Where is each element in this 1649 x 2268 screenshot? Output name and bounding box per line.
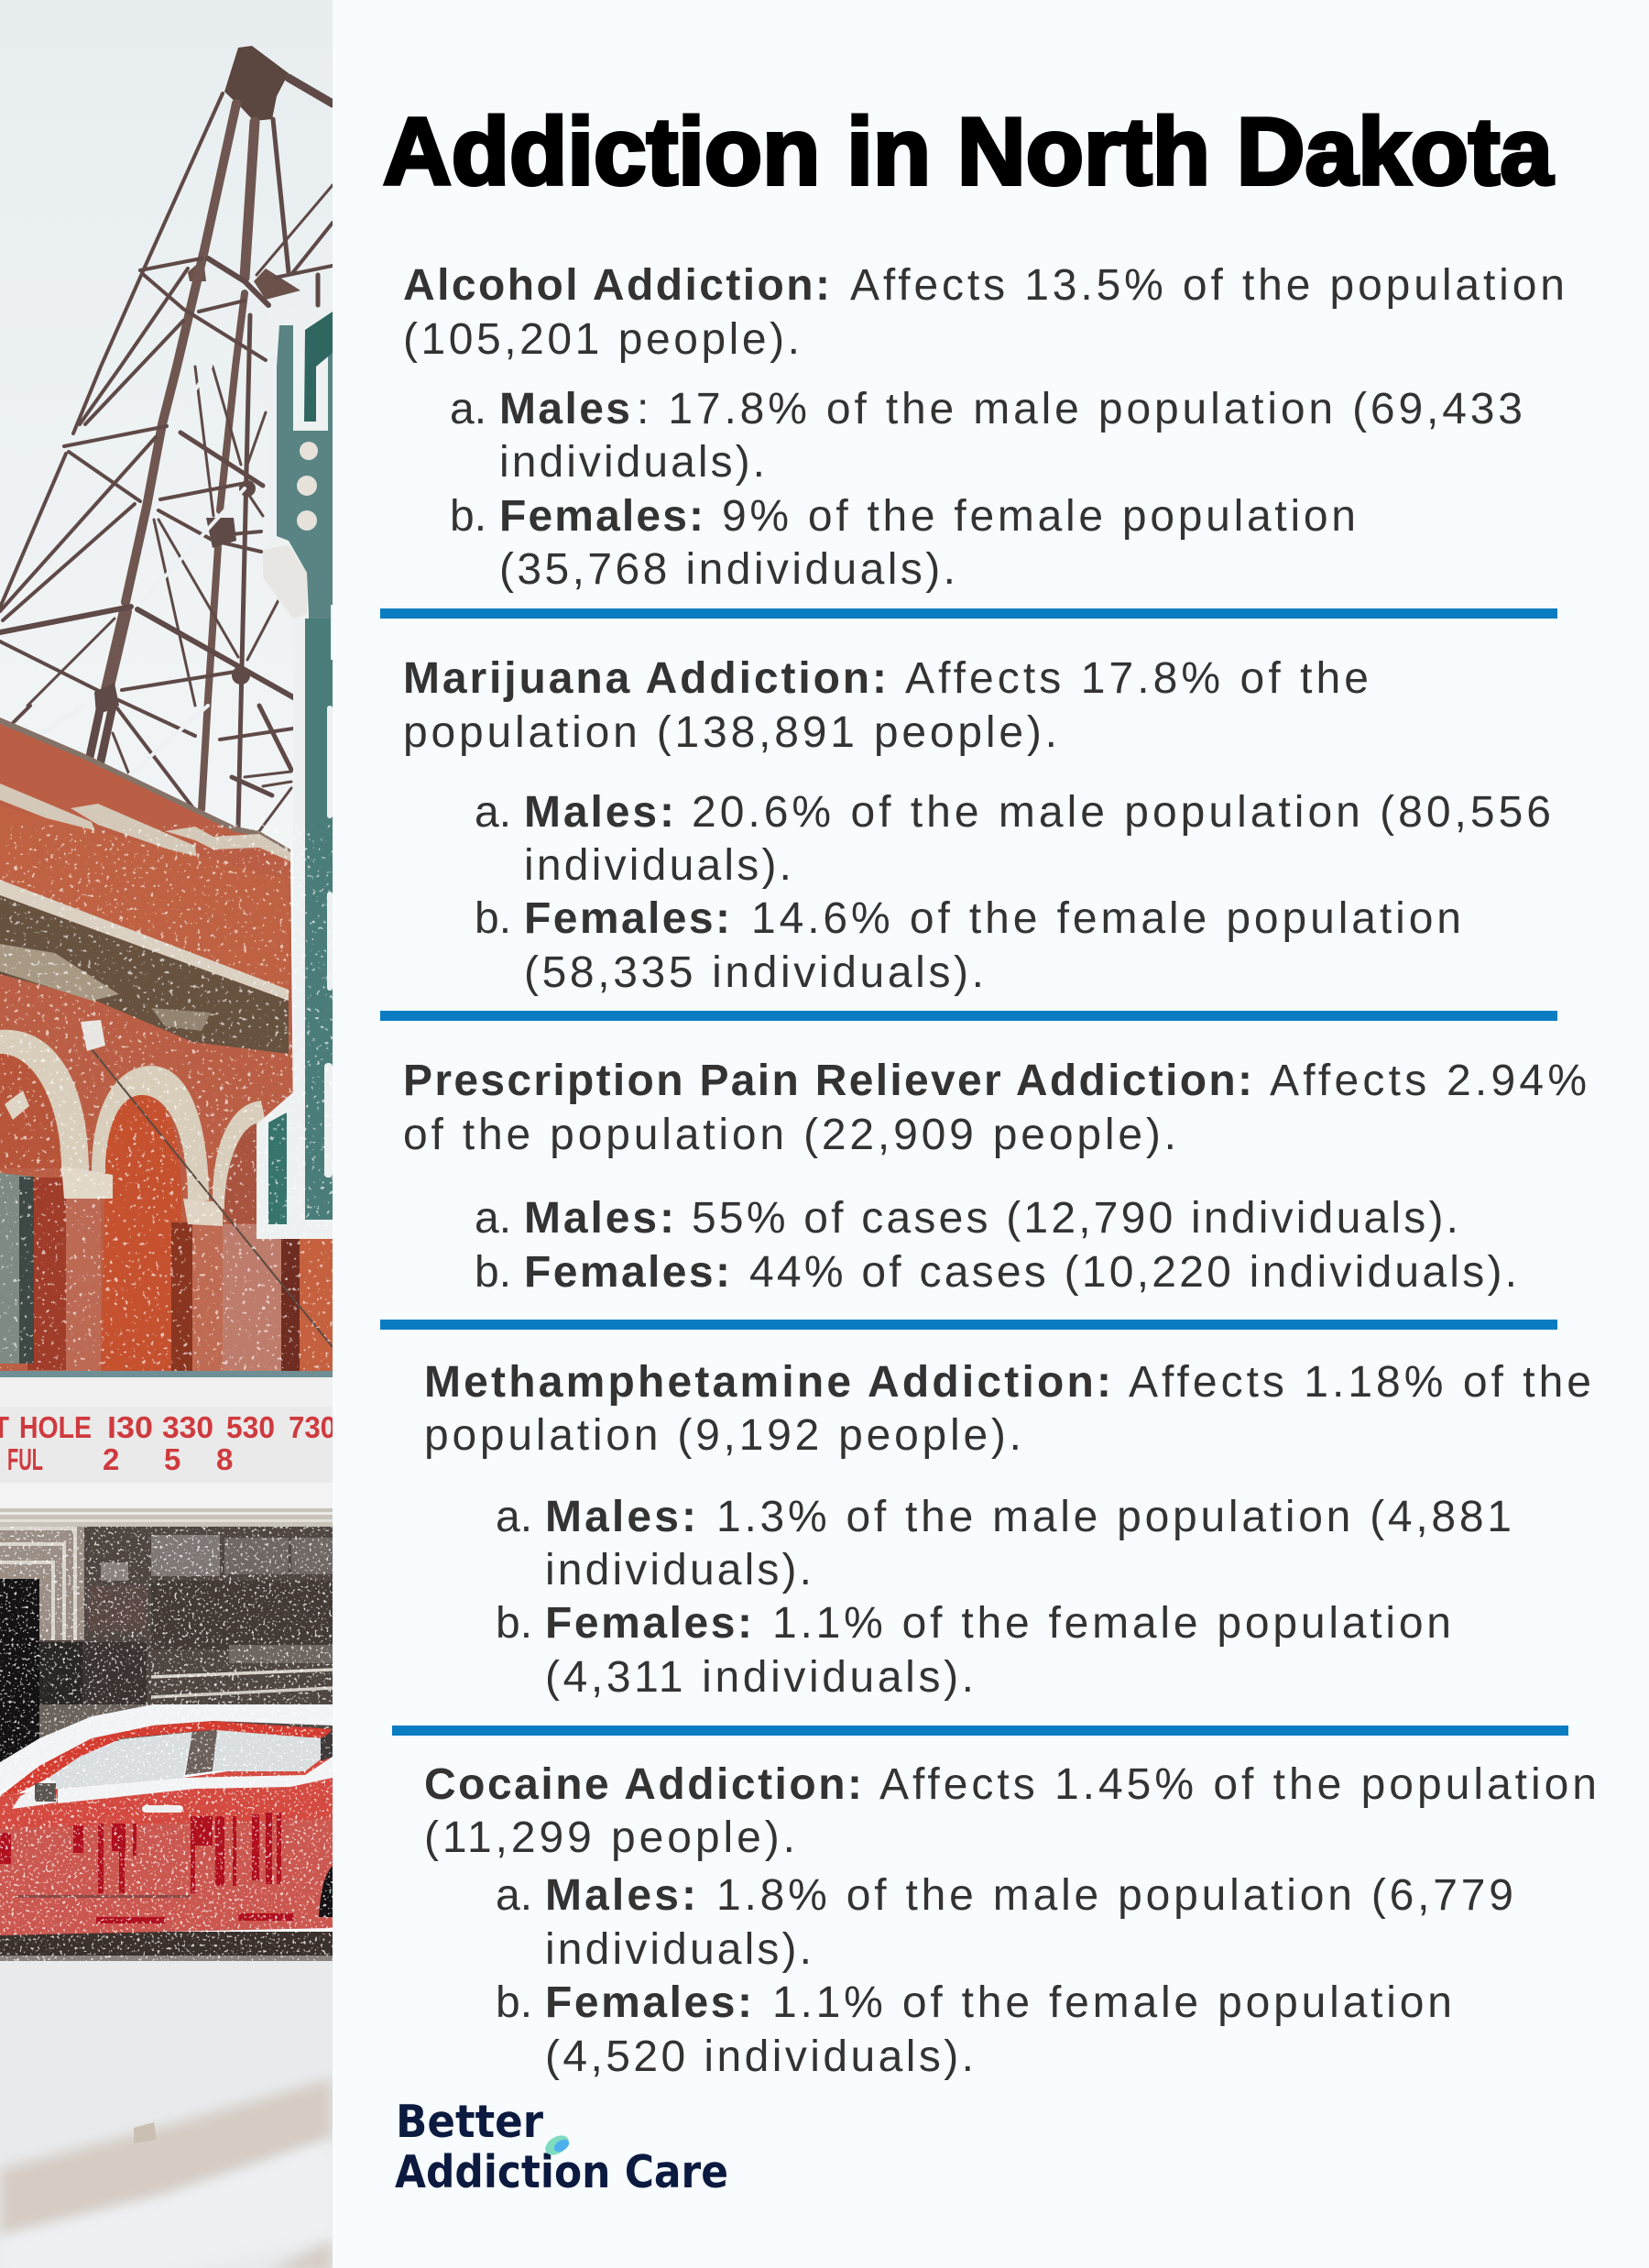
prescription heading: Prescription Pain Reliever Addiction:	[403, 1057, 1252, 1105]
marquee: 330	[162, 1410, 213, 1444]
methamphetamine females: 1.1% of the female population	[772, 1599, 1451, 1648]
section: marijuana: population (138,891 people).	[403, 708, 1057, 757]
prescription females: Females:	[524, 1248, 730, 1297]
cocaine males: Males:	[545, 1871, 696, 1920]
alcohol females: b.	[450, 492, 486, 541]
prescription males: a.	[475, 1194, 511, 1243]
marquee: 530	[226, 1410, 275, 1444]
methamphetamine males: Males:	[545, 1493, 696, 1541]
section: prescription pain reliever	[403, 1057, 1587, 1297]
prescription males: Males:	[524, 1194, 674, 1243]
section: marijuana: (58,335 individuals).	[524, 948, 984, 997]
prescription females: b.	[475, 1248, 511, 1297]
falling snow on street	[0, 1527, 333, 1961]
marquee: FUL	[7, 1442, 43, 1476]
cocaine males: a.	[496, 1871, 532, 1920]
prescription males: 55% of cases (12,790 individuals).	[692, 1194, 1458, 1243]
sign	[257, 296, 333, 1239]
alcohol females: 9% of the female population	[722, 492, 1356, 541]
alcohol heading: Alcohol Addiction:	[403, 261, 830, 310]
section: methamphetamine: individuals).	[545, 1546, 812, 1594]
storefront	[0, 1508, 333, 1762]
methamphetamine males: a.	[496, 1493, 532, 1541]
section: methamphetamine	[424, 1358, 1591, 1702]
cocaine males: 1.8% of the male population (6,779	[716, 1871, 1513, 1920]
marquee: 2	[103, 1442, 119, 1476]
marquee: 730	[289, 1410, 336, 1444]
section: alcohol: individuals).	[499, 438, 765, 487]
cocaine heading: Cocaine Addiction:	[424, 1760, 862, 1809]
prescription heading: Affects 2.94%	[1270, 1057, 1587, 1105]
methamphetamine males: 1.3% of the male population (4,881	[716, 1493, 1512, 1541]
red car	[0, 1704, 333, 1935]
alcohol males: Males	[499, 385, 630, 433]
section: alcohol: (105,201 people).	[403, 315, 800, 364]
marijuana males: Males:	[524, 788, 674, 837]
logo: Better Addiction Care	[395, 2096, 728, 2198]
road	[0, 1932, 333, 2268]
methamphetamine females: Females:	[545, 1599, 752, 1648]
section: cocaine: individuals).	[545, 1925, 812, 1974]
icon: leaf	[541, 2131, 573, 2159]
marijuana heading: Marijuana Addiction:	[403, 654, 887, 703]
methamphetamine females: b.	[496, 1599, 532, 1648]
section: cocaine: (4,520 individuals).	[545, 2032, 974, 2081]
marquee	[0, 1371, 336, 1508]
alcohol females: Females:	[499, 492, 704, 541]
logo: Better Addiction Care: Better	[396, 2096, 544, 2148]
brick wall	[0, 718, 333, 1375]
prescription females: 44% of cases (10,220 individuals).	[749, 1248, 1517, 1297]
marijuana heading: Affects 17.8% of the	[905, 654, 1369, 703]
falling snow on wall	[0, 825, 333, 1372]
marquee: 8	[216, 1442, 233, 1476]
section: prescription pain reliever: of the population (22,909 people).	[403, 1111, 1176, 1159]
marijuana males: a.	[475, 788, 511, 837]
section: methamphetamine: (4,311 individuals).	[545, 1653, 974, 1702]
cocaine females: Females:	[545, 1978, 752, 2027]
cocaine females: b.	[496, 1978, 532, 2027]
marijuana females: b.	[475, 894, 511, 943]
methamphetamine heading: Methamphetamine Addiction:	[424, 1358, 1111, 1407]
logo: Better Addiction Care: Addiction Care	[395, 2146, 728, 2198]
marquee: 5	[164, 1442, 180, 1476]
section: alcohol: (35,768 individuals).	[499, 545, 956, 594]
methamphetamine heading: Affects 1.18% of the	[1129, 1358, 1591, 1407]
section: marijuana	[403, 654, 1551, 997]
arches	[0, 1030, 89, 1173]
marquee: HOLE	[19, 1410, 92, 1444]
marquee: I30	[107, 1410, 153, 1444]
marijuana females: 14.6% of the female population	[751, 894, 1461, 943]
marijuana males: 20.6% of the male population (80,556	[692, 788, 1551, 837]
alcohol heading: Affects 13.5% of the population	[850, 261, 1565, 310]
alcohol males: a.	[450, 385, 486, 433]
alcohol males: : 17.8% of the male population (69,433	[637, 385, 1523, 433]
photo: snowy theatre street	[0, 0, 336, 2268]
section: cocaine: (11,299 people).	[424, 1813, 795, 1862]
section: marijuana: individuals).	[524, 841, 792, 890]
marijuana females: Females:	[524, 894, 730, 943]
section: methamphetamine: population (9,192 people).	[424, 1411, 1021, 1460]
title: Addiction in North Dakota	[383, 99, 1554, 205]
cocaine heading: Affects 1.45% of the population	[879, 1760, 1597, 1809]
section: alcohol	[403, 261, 1565, 594]
tower lattice	[0, 46, 333, 831]
cocaine females: 1.1% of the female population	[772, 1978, 1452, 2027]
section: cocaine	[424, 1760, 1597, 2081]
